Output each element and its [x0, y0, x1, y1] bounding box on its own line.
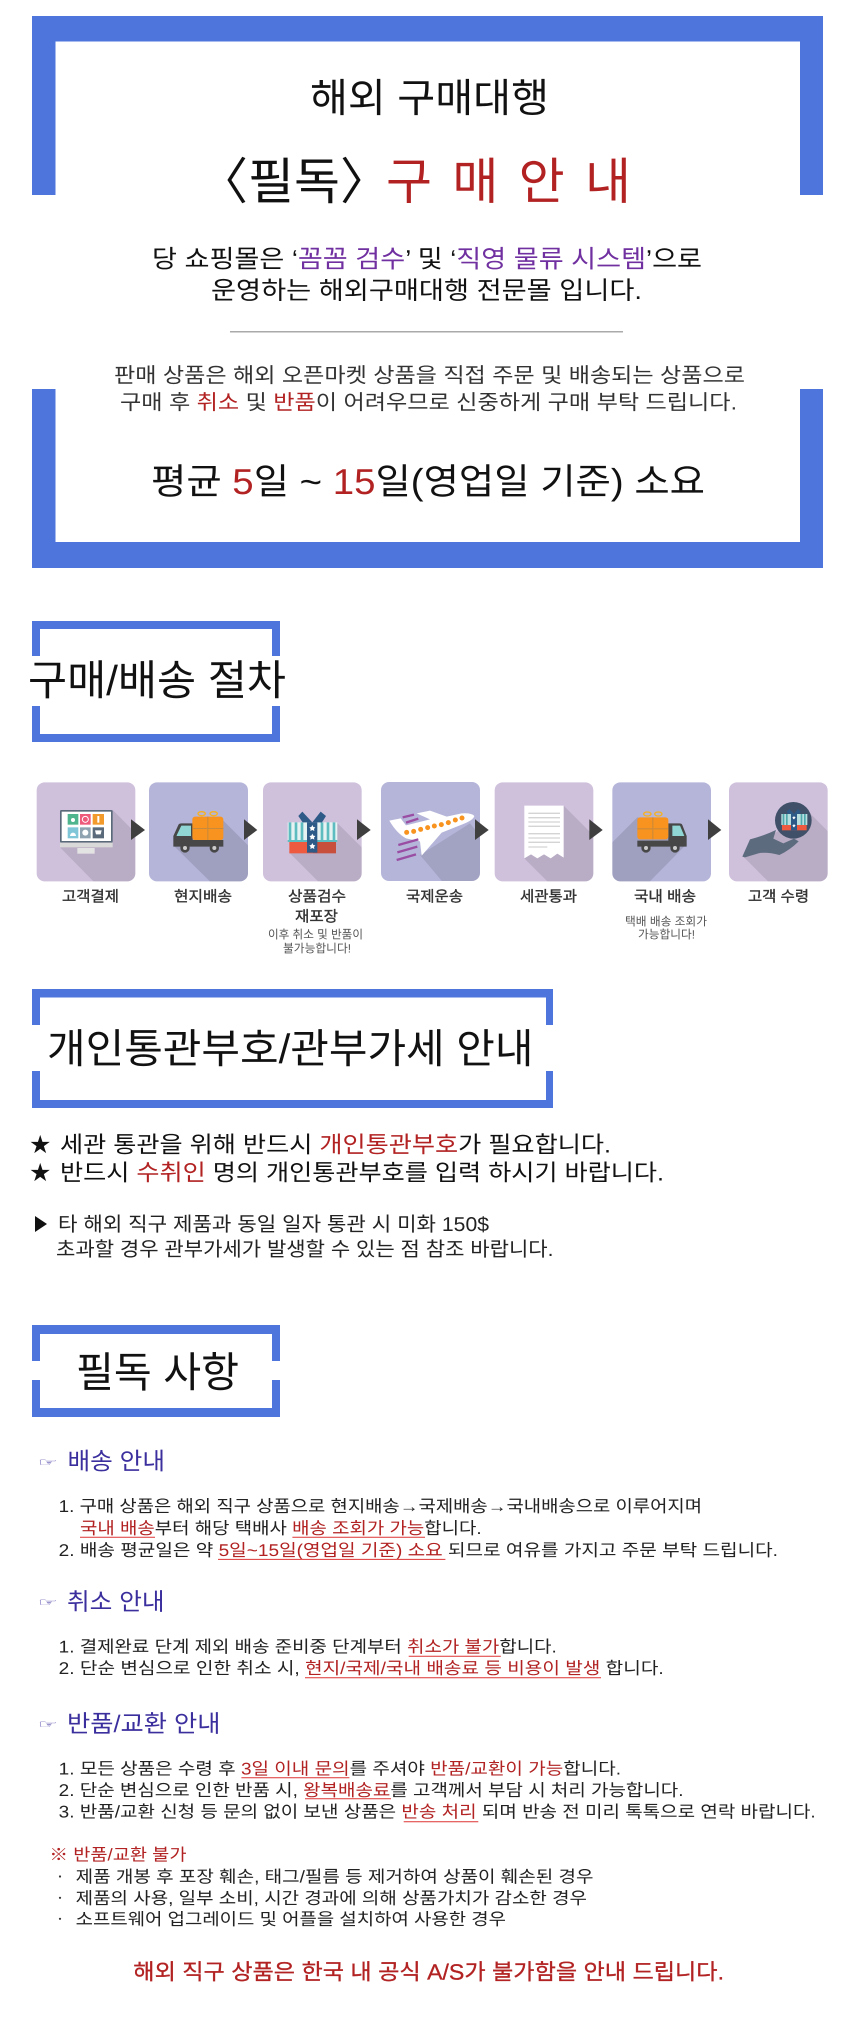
section: delivery information: 국내 배송 부터 해당 택배사 배송 조회가 가능 합니다. — [80, 1519, 482, 1538]
panel: customs number heading — [32, 989, 553, 1108]
step labels: 현지배송 — [174, 888, 232, 906]
text block: customs number notices: 세관 통관을 위해 반드시 개인통관부호 가 필요합니다. — [60, 1132, 611, 1158]
text block: shop introduction: 운영하는 해외구매대행 전문몰 입니다. — [211, 277, 642, 305]
step labels: 이후 취소 및 반품이 — [268, 928, 363, 942]
panel: must-read heading: 필독 사항 — [76, 1349, 239, 1396]
text block: tax threshold note — [35, 1214, 554, 1261]
text block: average delivery time: 평균 5일 ~ 15일(영업일 기준) 소요 — [151, 461, 705, 502]
section: return and exchange information: ☞ — [38, 1718, 58, 1731]
section: delivery information: 1. 구매 상품은 해외 직구 상품으로 현지배송→국제배송→국내배송으로 이루어지며 — [59, 1497, 702, 1516]
step labels: 국내 배송 — [634, 888, 696, 906]
section: return and exchange information: 3. 반품/교환 신청 등 문의 없이 보낸 상품은 반송 처리 되며 반송 전 미리 톡톡으로 연락 바랍니다. — [59, 1802, 816, 1821]
step labels: 가능합니다! — [638, 928, 695, 942]
section: cancellation information — [38, 1589, 664, 1678]
text block: customs number notices — [29, 1130, 664, 1187]
text block: shop introduction — [152, 246, 702, 305]
step labels: 고객결제 — [62, 888, 119, 906]
step 4 icon: airplane — [381, 782, 480, 881]
step 6 icon: domestic truck — [607, 782, 711, 887]
panel: top notice frame — [32, 16, 823, 568]
step 2 icon: truck — [149, 782, 253, 887]
text block: tax threshold note: 타 해외 직구 제품과 동일 일자 통관 시 미화 150$ — [58, 1214, 489, 1236]
step labels: 불가능합니다! — [283, 942, 351, 956]
arrow 2 — [244, 819, 257, 840]
text block: customs number notices: 반드시 수취인 명의 개인통관부호를 입력 하시기 바랍니다. — [60, 1160, 664, 1186]
text block: purchase caution — [114, 364, 745, 414]
step labels: 택배 배송 조회가 — [625, 914, 707, 928]
section: cancellation information: ☞ — [38, 1596, 58, 1609]
text block: customs number notices: ★ — [29, 1158, 51, 1187]
arrow 6 — [708, 819, 721, 840]
text block: customs number notices: ★ — [29, 1130, 51, 1159]
process flow: seven steps — [37, 782, 833, 956]
heading: must-read purchase guide: 구 매 안 내 — [386, 154, 631, 210]
panel: must-read heading — [32, 1325, 280, 1417]
step 5 icon: customs receipt — [494, 782, 594, 882]
panel: customs number heading: 개인통관부호/관부가세 안내 — [47, 1026, 534, 1072]
heading: must-read purchase guide — [198, 154, 631, 210]
step 1 icon: monitor — [37, 782, 140, 887]
panel: purchase and delivery process heading: 구매/배송 절차 — [28, 657, 286, 704]
text block: purchase caution: 판매 상품은 해외 오픈마켓 상품을 직접 주문 및 배송되는 상품으로 — [114, 364, 745, 388]
step labels: 재포장 — [295, 908, 338, 926]
panel: purchase and delivery process heading — [28, 621, 286, 742]
step 7 icon: hand holding gift — [729, 782, 833, 887]
step labels: 고객 수령 — [748, 888, 809, 906]
section: return and exchange information: 1. 모든 상품은 수령 후 3일 이내 문의 를 주셔야 반품/교환이 가능 합니다. — [59, 1759, 621, 1778]
text block: return and exchange exclusions: 제품의 사용, 일부 소비, 시간 경과에 의해 상품가치가 감소한 경우 — [76, 1889, 587, 1908]
arrow 4 — [475, 819, 489, 840]
step labels: 세관통과 — [520, 888, 577, 906]
heading: must-read purchase guide: 〈필독〉 — [198, 154, 390, 210]
step 3 icon: gift box — [263, 782, 367, 887]
section: cancellation information: 취소 안내 — [67, 1589, 165, 1616]
section: delivery information — [38, 1448, 778, 1560]
text block: return and exchange exclusions: 제품 개봉 후 포장 훼손, 태그/필름 등 제거하여 상품이 훼손된 경우 — [76, 1867, 593, 1886]
section: delivery information: 배송 안내 — [68, 1448, 165, 1475]
section: return and exchange information — [38, 1711, 816, 1822]
arrow 1 — [131, 819, 145, 840]
step labels — [62, 888, 809, 956]
text block: return and exchange exclusions: 소프트웨어 업그레이드 및 어플을 설치하여 사용한 경우 — [76, 1910, 506, 1929]
text block: tax threshold note: 초과할 경우 관부가세가 발생할 수 있는 점 참조 바랍니다. — [56, 1239, 554, 1261]
text block: return and exchange exclusions: ※ 반품/교환 불가 — [49, 1845, 187, 1864]
section: delivery information: ☞ — [38, 1456, 58, 1469]
arrow 5 — [589, 819, 603, 840]
section: return and exchange information: 반품/교환 안내 — [67, 1711, 220, 1738]
step labels: 국제운송 — [406, 888, 463, 906]
text block: return and exchange exclusions — [49, 1845, 593, 1929]
title: overseas purchasing: 해외 구매대행 — [310, 77, 549, 121]
closing notice: 해외 직구 상품은 한국 내 공식 A/S가 불가함을 안내 드립니다. — [133, 1960, 724, 1984]
section: cancellation information: 1. 결제완료 단계 제외 배송 준비중 단계부터 취소가 불가 합니다. — [59, 1637, 557, 1656]
section: cancellation information: 2. 단순 변심으로 인한 취소 시, 현지/국제/국내 배송료 등 비용이 발생 합니다. — [59, 1659, 664, 1678]
arrow 3 — [357, 819, 371, 840]
text block: purchase caution: 구매 후 취소 및 반품이 어려우므로 신중하게 구매 부탁 드립니다. — [120, 392, 737, 414]
step labels: 상품검수 — [288, 888, 346, 906]
text block: shop introduction: 당 쇼핑몰은 ‘ 꼼꼼 검수 ’ 및 ‘직영 물류 시스템 ’으로 — [152, 246, 702, 274]
section: delivery information: 2. 배송 평균일은 약 5일~15일(영업일 기준) 소요 되므로 여유를 가지고 주문 부탁 드립니다. — [59, 1541, 778, 1560]
section: return and exchange information: 2. 단순 변심으로 인한 반품 시, 왕복배송료 를 고객께서 부담 시 처리 가능합니다. — [59, 1781, 683, 1800]
